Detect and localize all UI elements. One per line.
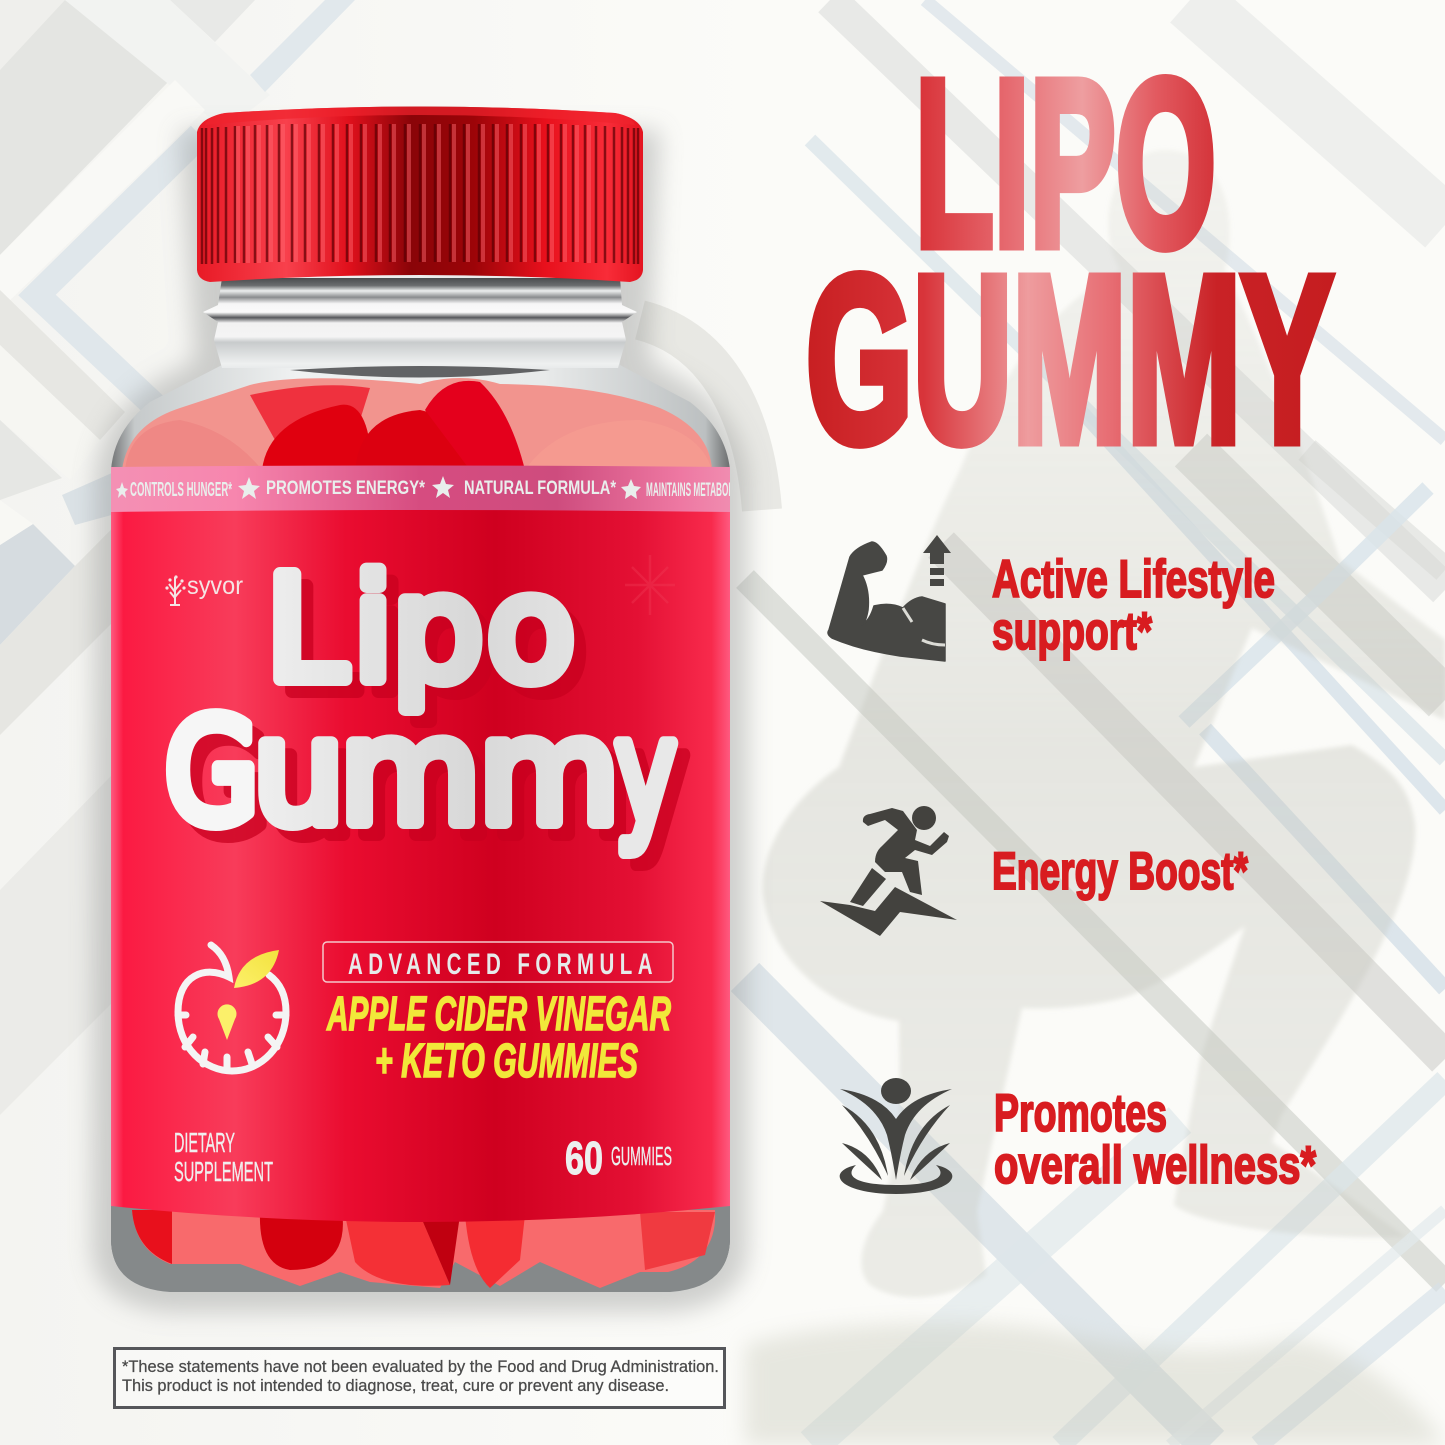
count: 60 gummies <box>565 1132 672 1184</box>
label <box>111 466 748 1222</box>
feature text <box>992 550 1275 661</box>
product name: Lipo Gummy <box>165 545 688 869</box>
product name: Lipo Gummy: y <box>627 701 688 868</box>
feature text: overall wellness* <box>994 1136 1316 1195</box>
FDA disclaimer box <box>114 1348 724 1408</box>
badge: advanced formula <box>323 942 673 982</box>
dietary supplement: DIETARY <box>174 1127 235 1158</box>
dietary supplement: SUPPLEMENT <box>174 1156 273 1187</box>
decorative starburst <box>625 555 675 615</box>
feature: energy boost <box>820 806 1248 936</box>
feature text: Active Lifestyle <box>992 550 1275 609</box>
bottle shadow <box>92 130 748 1312</box>
icon: flower figure <box>840 1078 952 1194</box>
product name: Lipo Gummy: G <box>165 690 259 857</box>
icon: runner <box>820 806 957 936</box>
feature text <box>994 1084 1316 1195</box>
pink claims band: CONTROLS HUNGER* <box>130 479 232 501</box>
dietary supplement <box>174 1127 273 1187</box>
glass jar <box>111 275 730 1292</box>
label red body <box>111 510 730 1222</box>
product bottle <box>92 106 748 1312</box>
product name: Lipo Gummy: umm <box>265 700 631 868</box>
label: GUMMIES <box>611 1141 672 1171</box>
feature text: Promotes <box>994 1084 1167 1143</box>
product name: Lipo Gummy: G <box>177 702 271 869</box>
pink claims band: PROMOTES ENERGY* <box>266 478 425 499</box>
feature text: support* <box>992 602 1152 661</box>
gummies at top of jar <box>122 378 712 470</box>
product name: Lipo Gummy: Lipo <box>266 545 575 713</box>
background: faded squatting athlete silhouette <box>640 150 1445 1445</box>
FDA disclaimer box: *These statements have not been evaluated by the Food and Drug Administration. <box>122 1358 719 1376</box>
icon: flexed arm with arrow <box>828 535 951 661</box>
formula text in yellow: + KETO GUMMIES <box>375 1035 638 1088</box>
red ribbed cap <box>197 106 643 282</box>
product name: Lipo Gummy: Lipo <box>278 557 587 725</box>
brand: syvor: syvor <box>187 572 243 600</box>
product name: Lipo Gummy: umm <box>253 688 619 856</box>
brand: syvor <box>165 572 243 605</box>
pink claims band: NATURAL FORMULA* <box>464 478 616 499</box>
feature text: Energy Boost* <box>992 842 1248 901</box>
formula text in yellow <box>326 988 671 1088</box>
text: MAINTAINS METABOLISM <box>646 480 748 501</box>
formula text in yellow: APPLE CIDER VINEGAR <box>326 988 671 1041</box>
pink claims band <box>111 466 748 512</box>
feature: overall wellness <box>840 1078 1316 1195</box>
count: 60 gummies: 60 <box>565 1132 603 1184</box>
FDA disclaimer box: This product is not intended to diagnose, treat, cure or prevent any disease. <box>122 1377 669 1395</box>
feature: active lifestyle <box>828 535 1275 661</box>
product name: Lipo Gummy: y <box>615 689 676 856</box>
gummies at bottom of jar <box>132 1210 715 1288</box>
icon: apple clock <box>178 945 286 1071</box>
badge: advanced formula: ADVANCED FORMULA <box>348 948 658 981</box>
title: LIPO GUMMY <box>806 31 1333 492</box>
